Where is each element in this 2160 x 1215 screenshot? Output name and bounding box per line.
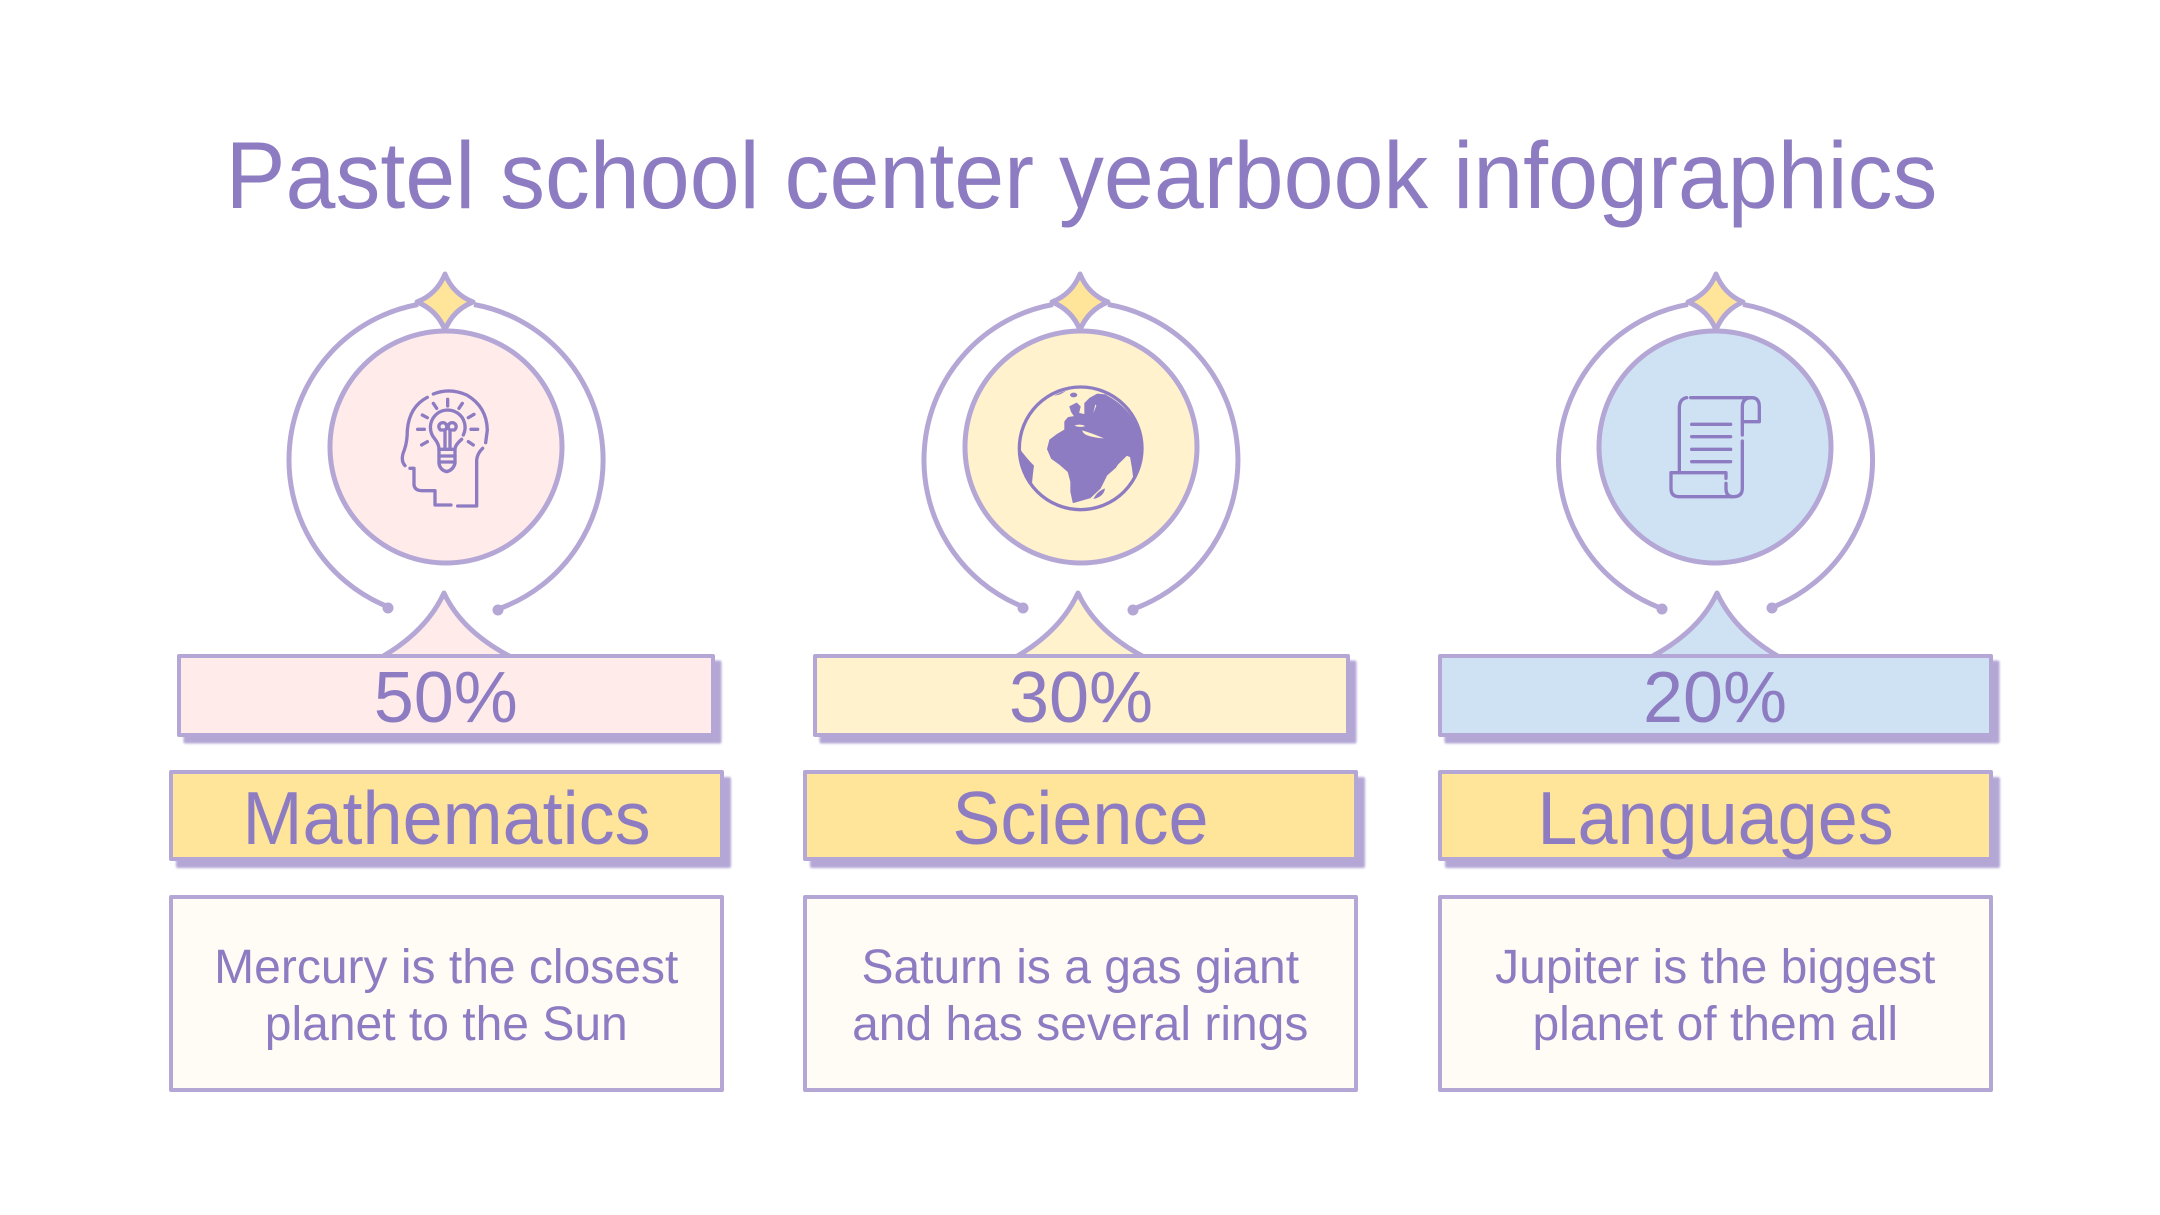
pointer: blue spike bbox=[1649, 593, 1781, 658]
panel: Languages bbox=[1438, 272, 2002, 1092]
text box: Mathematics description: planet to the Sun bbox=[265, 998, 628, 1050]
percent box: 30% bbox=[812, 654, 1350, 737]
percent box: 50% bbox=[176, 654, 715, 737]
text box: Mathematics description: Mercury is the closest bbox=[214, 940, 678, 994]
title: Pastel school center yearbook infographics bbox=[226, 123, 1937, 229]
icon: globe bbox=[1019, 387, 1142, 510]
percent box: 50%: 50% bbox=[374, 658, 518, 738]
label box: Science: Science bbox=[952, 776, 1208, 860]
dot: ring end left bbox=[1018, 602, 1028, 614]
arc: left ring bbox=[1559, 304, 1688, 608]
label box: Science bbox=[802, 770, 1358, 861]
arc: left ring bbox=[289, 304, 418, 607]
emblem: Mathematics ring and circle bbox=[286, 272, 606, 654]
dot: ring end right bbox=[492, 604, 504, 616]
emblem: Languages ring and circle bbox=[1556, 272, 1876, 654]
circle: pink badge bbox=[330, 331, 562, 563]
text box: Languages description bbox=[1438, 894, 1993, 1092]
arc: right ring bbox=[474, 304, 603, 609]
percent box: 20%: 20% bbox=[1643, 658, 1787, 738]
percent box: 20% bbox=[1438, 654, 1992, 737]
panel: Mathematics bbox=[169, 272, 732, 1092]
label box: Mathematics: Mathematics bbox=[242, 776, 650, 860]
label box: Languages bbox=[1438, 770, 1993, 861]
star: yellow sparkle bbox=[1688, 274, 1743, 330]
text box: Science description: and has several rings bbox=[852, 998, 1308, 1050]
text box: Languages description: Jupiter is the biggest bbox=[1495, 940, 1935, 994]
dot: ring end left bbox=[382, 602, 394, 614]
pointer: yellow spike bbox=[1014, 593, 1146, 658]
arc: right ring bbox=[1108, 304, 1238, 609]
label box: Languages: Languages bbox=[1537, 776, 1893, 860]
star: yellow sparkle bbox=[1052, 274, 1108, 330]
circle: blue badge bbox=[1599, 331, 1831, 563]
label box: Mathematics bbox=[168, 770, 724, 861]
dot: ring end left bbox=[1656, 604, 1668, 614]
pointer: pink spike bbox=[380, 593, 513, 658]
star: yellow sparkle bbox=[417, 274, 473, 330]
arc: left ring bbox=[924, 304, 1053, 607]
text box: Mathematics description bbox=[168, 894, 724, 1092]
percent box: 30%: 30% bbox=[1009, 658, 1153, 738]
dot: ring end right bbox=[1766, 602, 1778, 614]
circle: yellow badge bbox=[965, 331, 1197, 563]
text box: Science description: Saturn is a gas giant bbox=[861, 940, 1299, 994]
icon: scroll bbox=[1671, 398, 1759, 497]
panel: Science bbox=[803, 272, 1366, 1092]
text box: Science description bbox=[802, 894, 1358, 1092]
icon: head with lightbulb bbox=[402, 391, 487, 506]
dot: ring end right bbox=[1128, 604, 1138, 616]
emblem: Science ring and circle bbox=[922, 272, 1240, 654]
text box: Languages description: planet of them all bbox=[1532, 998, 1898, 1050]
arc: right ring bbox=[1743, 304, 1873, 607]
